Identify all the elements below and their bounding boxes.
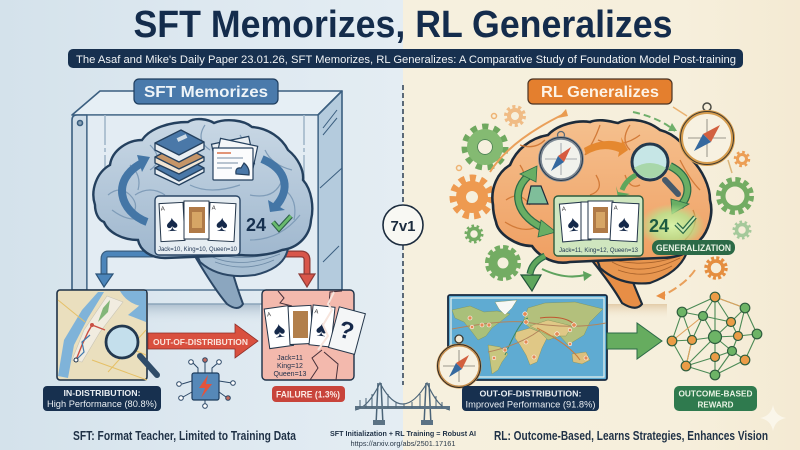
result: 24 with check: 24 [246,215,266,235]
glow behind 24 [639,204,705,248]
result: 24 with check [246,215,291,235]
card panel: generalized cards: ♠ [617,211,631,236]
circular arrow: left [122,155,150,222]
flow arrow: to failure [285,254,315,287]
brain: stem and cerebellum [590,252,687,308]
center dashed divider [402,85,404,385]
world map card [448,295,607,380]
label: outcome-based reward: REWARD [698,400,734,410]
label: generalization [652,240,735,255]
continents [452,300,603,374]
title: SFT Memorizes, RL Generalizes [134,4,672,46]
card panel: generalized cards: A [614,205,618,212]
card panel: generalized cards: Jack=11, King=12, Queen=13 [559,247,638,254]
floor shadow [148,304,260,324]
arrow: to outcome map [521,256,545,291]
result: 24 with check: 24 [649,216,669,236]
panel: SFT Memorizes [43,79,365,443]
map card: in-distribution [57,290,147,380]
badge: 7v1: 7v1 [390,218,416,235]
failure card: ♠ [315,317,328,342]
label: in-distribution result: IN-DISTRIBUTION: [64,388,141,398]
card panel: training cards: ♠ [166,211,179,236]
floor shadow [607,304,667,320]
label: out-of-distribution result: Improved Performance (91.8%) [466,400,596,410]
arrow: map to reward [607,323,662,359]
brain folds [108,125,300,240]
arrow: out-of-distribution: OUT-OF-DISTRIBUTION [153,337,248,347]
badge: 7v1 [383,205,423,245]
routes [452,317,606,360]
icon: flash cards [212,136,258,180]
failure card [262,290,365,380]
heading: SFT Memorizes [134,79,278,104]
decorative gears [453,107,751,297]
watermark star [760,405,786,431]
neural network [667,292,762,380]
glass box frame [72,91,342,290]
failure card: ? [336,316,357,346]
icon: compass in brain [540,132,582,180]
label: failure result [272,386,345,402]
icon: compass top right [680,103,734,164]
icon: magnifier [106,326,157,375]
background: right cream half [403,0,800,450]
label: failure result: FAILURE (1.3%) [276,390,340,400]
icon: stack of books [155,130,204,185]
failure card: A [267,312,272,319]
brain folds [505,125,700,240]
brain: stem and cerebellum [195,248,288,308]
card panel: training cards [155,196,240,255]
background: left blue half [0,0,403,450]
icon: bridge [355,383,450,425]
card panel: training cards: Jack=10, King=10, Queen=10 [158,246,237,253]
heading: RL Generalizes [528,79,672,104]
label: generalization: GENERALIZATION [656,243,731,253]
heading: RL Generalizes: RL Generalizes [541,84,659,101]
arrow: out-of-distribution [148,324,258,358]
label: outcome-based reward: OUTCOME-BASED [678,388,752,398]
brain: orange [492,120,711,263]
card panel: training cards: ♠ [215,211,229,236]
label: in-distribution result [43,386,161,411]
heading: SFT Memorizes: SFT Memorizes [144,84,268,101]
icon: chip with lightning [177,358,235,408]
card panel: generalized cards [554,196,643,256]
icon: flask [527,186,548,204]
label: out-of-distribution result: OUT-OF-DISTRIBUTION: [480,388,582,398]
circular arrow: green right [670,166,689,214]
text: bridge equation: SFT Initialization + RL Training = Robust AI [330,429,476,438]
card panel: generalized cards: A [562,207,566,213]
panel: RL Generalizes [438,79,768,443]
circular arrow: right [262,159,285,212]
subtitle banner [68,49,743,68]
result: 24 with check [649,216,695,236]
label: outcome-based reward [674,386,757,411]
failure card: Queen=13 [274,371,307,378]
failure card: ♠ [272,316,287,343]
arrow: compass to magnifier [584,137,628,157]
label: out-of-distribution result [462,386,599,411]
icon: magnifier in brain [632,144,678,194]
circular arrow: green left [518,166,556,237]
card panel: training cards: A [212,205,216,212]
label: in-distribution result: High Performance (80.8%) [47,399,157,409]
failure card: A [314,309,319,316]
caption: SFT: SFT: Format Teacher, Limited to Training Data [73,429,297,443]
failure card: King=12 [277,363,303,370]
failure card: Jack=11 [277,355,303,362]
subtitle banner: The Asaf and Mike's Daily Paper 23.01.26, SFT Memorizes, RL Generalizes: A Comparative Study of Foundation Model Post-training [76,54,736,66]
text: paper link: https://arxiv.org/abs/2501.17161 [350,439,456,448]
flow arrow: to in-distribution [96,254,155,287]
arrow: magnifier to cards [616,175,636,198]
card panel: generalized cards: ♠ [566,211,580,236]
icon: compass on map [438,335,480,388]
card panel: training cards: A [161,206,165,213]
brain: blue [93,119,312,258]
